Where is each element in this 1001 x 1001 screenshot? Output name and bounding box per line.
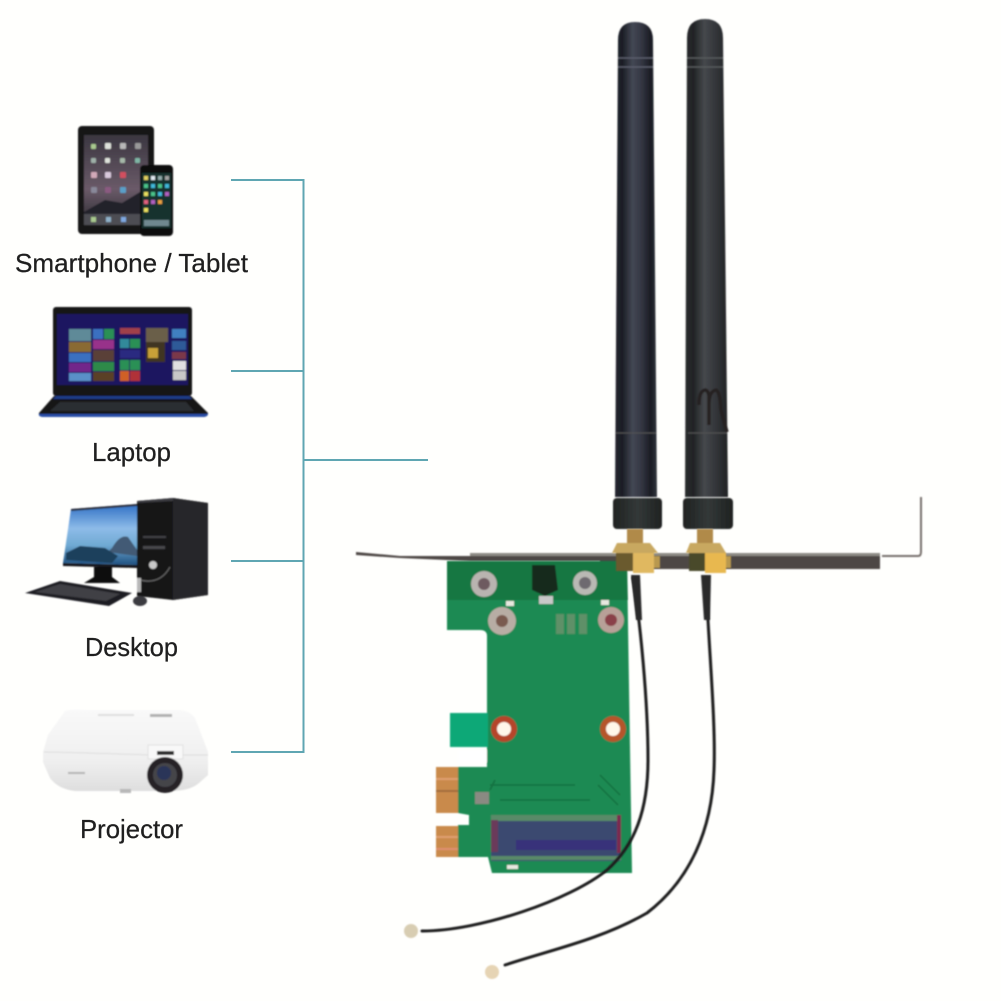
left antenna — [613, 22, 662, 529]
label: Laptop: Laptop — [92, 437, 171, 467]
icon: desktop computer — [25, 498, 208, 606]
icon: tablet and smartphone — [78, 126, 173, 236]
traces — [490, 775, 620, 805]
green PCB — [447, 561, 632, 873]
screws — [471, 571, 624, 635]
label: Desktop: Desktop — [85, 632, 178, 662]
label: Projector: Projector — [80, 814, 183, 844]
mini PCIe slot — [491, 815, 621, 869]
cables — [422, 578, 714, 965]
white notch — [458, 750, 487, 762]
mounting holes — [491, 716, 626, 742]
label: Smartphone / Tablet: Smartphone / Tablet — [15, 248, 249, 278]
mounting bracket — [356, 497, 921, 569]
gold contact fingers — [436, 767, 459, 857]
cable end connectors — [404, 924, 499, 979]
transistor chip — [506, 565, 609, 634]
light green tab — [450, 713, 488, 747]
right gold SMA connector — [686, 529, 731, 573]
icon: projector — [43, 710, 208, 793]
left gold SMA connector — [612, 529, 660, 573]
right antenna — [683, 19, 733, 529]
darker top shading — [447, 561, 628, 600]
cable connector sleeves — [631, 575, 711, 620]
icon: laptop — [39, 307, 208, 417]
wireless adapter circuit board — [436, 561, 632, 873]
connector lines — [231, 180, 428, 752]
